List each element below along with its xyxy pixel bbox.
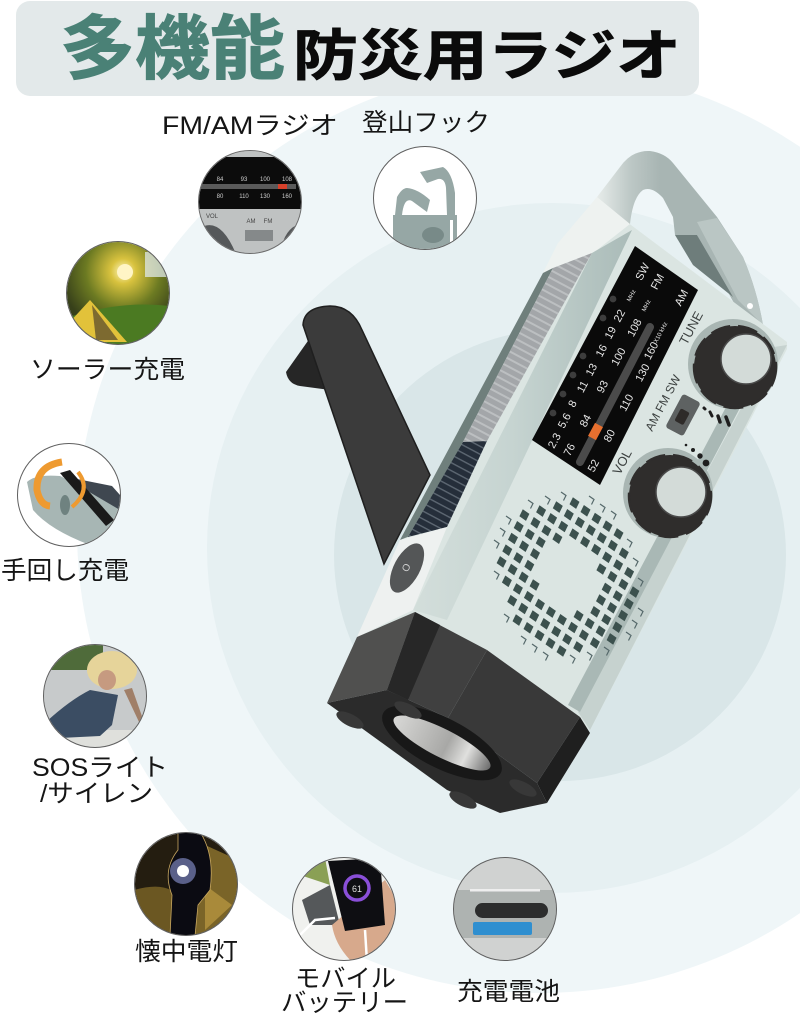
label: mobile battery line one: モバイル	[295, 965, 396, 993]
icon: mobile battery thumbnail	[292, 858, 397, 962]
icon: solar charging thumbnail	[66, 240, 170, 345]
dial: scale numbers: MHz	[641, 299, 653, 313]
label: SOS light / siren: SOSライト	[32, 754, 168, 782]
radio: main body	[357, 222, 787, 730]
dial: scale numbers: 5.6	[556, 411, 574, 431]
icon: FM/AM radio thumbnail: VOL	[206, 214, 219, 220]
dial: scale numbers: 160X10 kHz	[642, 320, 672, 362]
dial: scale numbers: 8	[566, 398, 580, 410]
dial: scale numbers: FM	[649, 272, 667, 292]
icon: FM/AM radio thumbnail: 84	[217, 177, 224, 183]
lamp: corner screws	[334, 698, 539, 812]
icon: climbing hook thumbnail	[374, 146, 476, 251]
dial: scale numbers: MHz	[626, 289, 638, 303]
lamp: lens	[388, 706, 496, 780]
icon: FM/AM radio thumbnail: 130	[260, 194, 271, 200]
radio: right grey stripe	[568, 343, 772, 712]
label: climbing hook: 登山フック	[362, 109, 490, 137]
radio: solar panel light section	[463, 253, 592, 442]
radio: side band	[413, 230, 632, 620]
label: SOS second line: /サイレン	[40, 780, 153, 808]
icon: FM/AM radio thumbnail: 100	[260, 177, 271, 183]
dial: scale numbers: AM	[673, 288, 691, 308]
dial: indicator dots	[550, 296, 616, 416]
dial: scale numbers: 100	[609, 346, 629, 368]
icon: mobile battery thumbnail: 61	[352, 884, 362, 894]
icon: hand crank thumbnail	[18, 444, 121, 546]
dial: scale numbers: 130	[633, 362, 653, 384]
icon: FM/AM radio thumbnail: FM	[264, 219, 272, 225]
title banner: 防災用ラジオ	[293, 25, 681, 87]
label: rechargeable battery: 充電電池	[457, 978, 560, 1006]
dial: tuning bar	[580, 327, 650, 462]
label: flashlight: 懐中電灯	[135, 938, 238, 966]
radio: volume level dots	[685, 444, 709, 466]
dial: scale numbers: 13	[584, 362, 600, 378]
label: solar charging: ソーラー充電	[30, 356, 185, 384]
icon: rechargeable battery thumbnail	[453, 857, 557, 961]
radio: power button	[383, 538, 431, 598]
radio: band slider	[665, 394, 701, 436]
icon: flashlight thumbnail	[134, 832, 238, 936]
dial: scale numbers: 84	[578, 413, 594, 429]
radio: top light shell	[543, 197, 630, 273]
lamp: lens ring	[372, 691, 512, 795]
dial: scale numbers: 108	[625, 317, 645, 339]
dial: scale numbers: 80	[602, 428, 618, 444]
radio: control labels: VOL	[609, 447, 635, 477]
dial: scale numbers: SW	[634, 261, 653, 283]
dial: scale numbers: 16	[594, 343, 610, 359]
dial: scale numbers: 93	[595, 379, 611, 395]
dial: scale numbers: 110	[618, 392, 636, 414]
dial: scale numbers: 19	[603, 325, 619, 341]
radio: power button: O	[400, 562, 414, 574]
dial: scale numbers	[546, 261, 691, 474]
icon: FM/AM radio thumbnail: AM	[246, 219, 256, 225]
label: hand crank charging: 手回し充電	[1, 557, 129, 585]
radio: black lamp housing	[327, 612, 590, 813]
dial: scale numbers: 11	[575, 379, 591, 395]
icon: FM/AM radio thumbnail: 80	[217, 194, 224, 200]
title banner: 多機能	[60, 10, 285, 88]
radio: hand crank	[303, 306, 430, 564]
icon: FM/AM radio thumbnail: 160	[282, 194, 293, 200]
radio: lower white shell	[357, 527, 447, 637]
dial: scale numbers: 76	[562, 442, 578, 458]
icon: FM/AM radio thumbnail: 93	[241, 177, 248, 183]
dial: scale numbers: 52	[586, 458, 602, 474]
dial: scale numbers: 22	[612, 308, 628, 324]
radio: tune knob	[688, 319, 778, 409]
radio: tune level marks	[704, 408, 729, 425]
icon: FM/AM radio thumbnail: 108	[282, 177, 293, 183]
radio: right edge strip	[578, 345, 787, 730]
icon: FM/AM radio thumbnail: 110	[239, 194, 249, 200]
radio: control labels: TUNE	[676, 309, 706, 347]
radio: control labels	[609, 309, 706, 477]
radio: control labels: AM FM SW	[642, 372, 684, 433]
radio: speaker grille	[494, 492, 643, 664]
radio: carry handle	[590, 151, 763, 325]
radio: volume knob	[623, 448, 713, 538]
title banner	[16, 1, 699, 96]
radio: tuning dial panel	[532, 246, 698, 485]
dial: scale numbers: 2.3	[546, 431, 564, 451]
icon: SOS siren thumbnail	[43, 644, 147, 750]
icon: FM/AM radio thumbnail	[198, 150, 302, 254]
radio: crank stem	[286, 338, 330, 390]
radio product	[286, 151, 787, 813]
radio: left edge strip	[400, 268, 553, 540]
dial: orange pointer	[592, 425, 599, 438]
radio: solar panel dark section	[408, 441, 487, 537]
label: FM/AM radio: FM/AMラジオ	[162, 112, 338, 140]
